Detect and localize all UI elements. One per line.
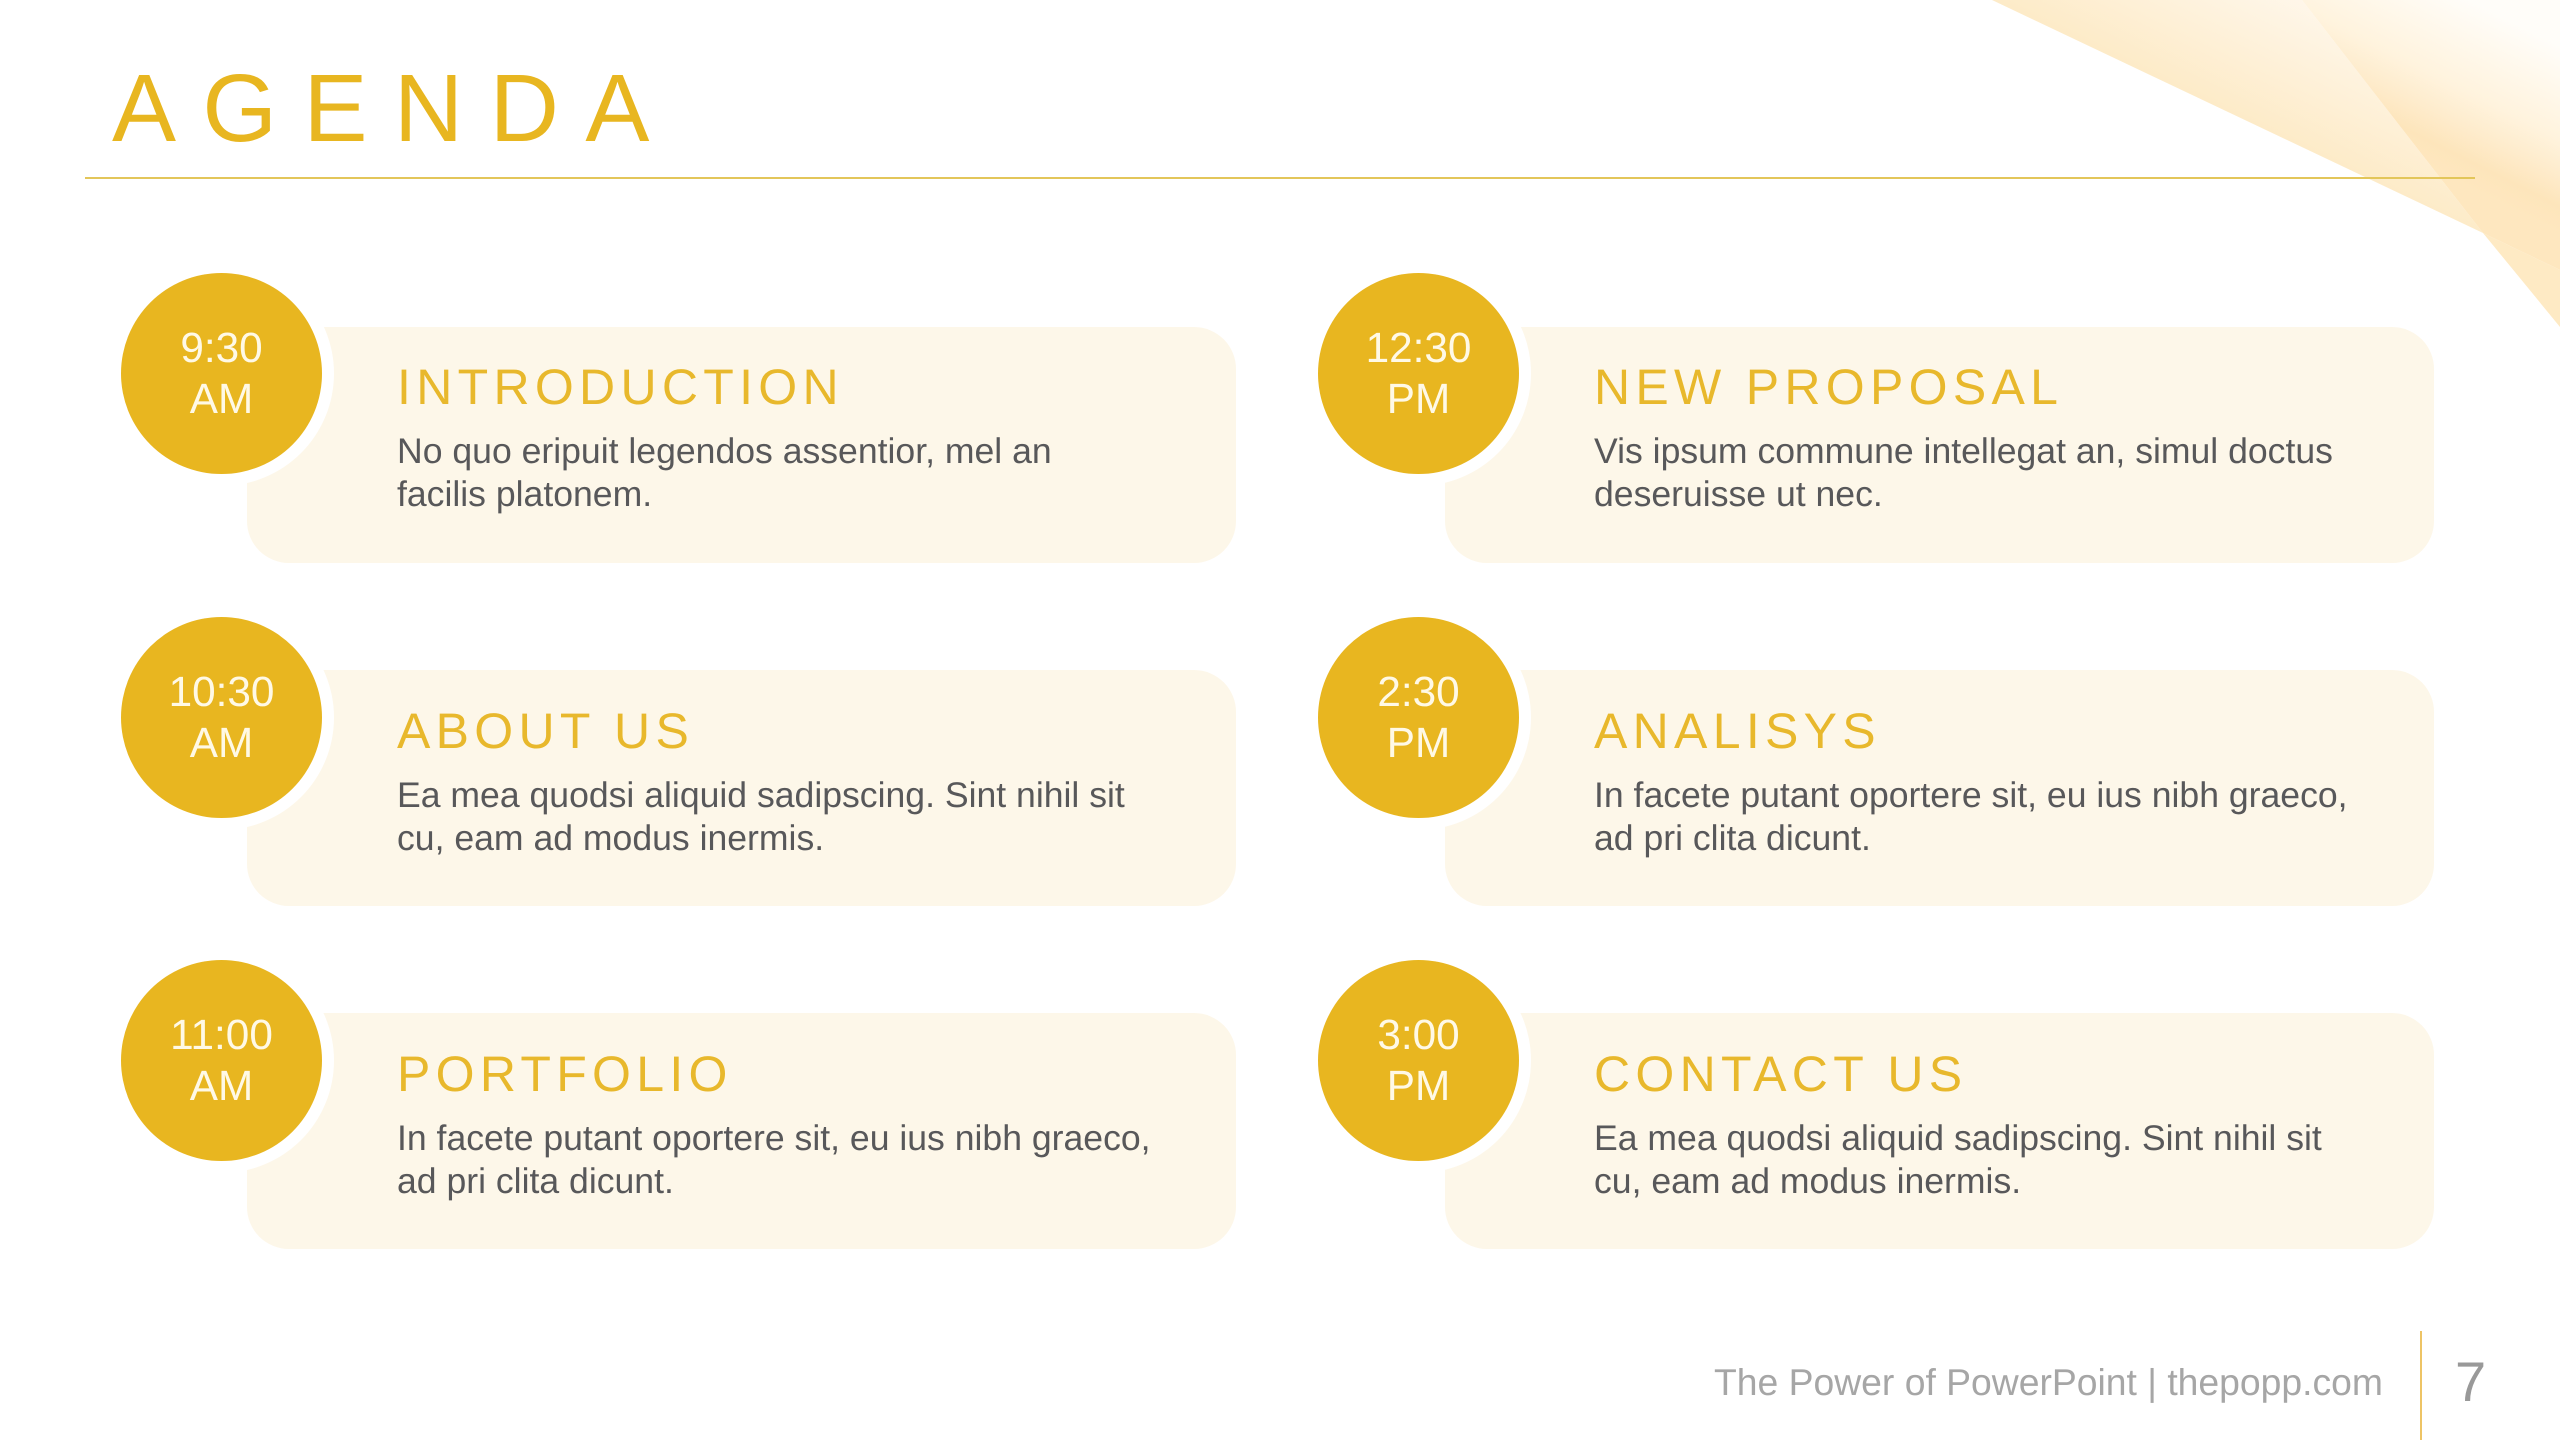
white ring xyxy=(109,605,334,830)
time circle xyxy=(121,273,322,474)
title: AGENDA xyxy=(112,55,676,162)
time circle xyxy=(1318,273,1519,474)
time label: 11:00 xyxy=(170,1011,273,1058)
card background xyxy=(1444,670,2434,906)
time circle xyxy=(1318,617,1519,818)
description xyxy=(397,775,1125,858)
agenda item: analisys xyxy=(1318,617,2434,906)
card background xyxy=(1444,327,2434,563)
description xyxy=(397,1118,1151,1201)
card background xyxy=(1444,1012,2434,1248)
description: Vis ipsum commune intellegat an, simul doctus xyxy=(1594,431,2333,471)
time label xyxy=(1377,668,1460,766)
white ring xyxy=(109,261,334,486)
time label xyxy=(1377,1011,1460,1109)
page number: 7 xyxy=(2455,1350,2486,1413)
heading: INTRODUCTION xyxy=(397,359,844,415)
time label xyxy=(170,1011,273,1109)
time label: AM xyxy=(190,1062,253,1109)
title rule xyxy=(85,177,2475,179)
description: Ea mea quodsi aliquid sadipscing. Sint nihil sit xyxy=(1594,1118,2322,1158)
time label: 3:00 xyxy=(1377,1011,1460,1058)
white ring xyxy=(109,948,334,1173)
time circle xyxy=(121,617,322,818)
heading: NEW PROPOSAL xyxy=(1594,359,2063,415)
description: In facete putant oportere sit, eu ius nibh graeco, xyxy=(397,1118,1151,1158)
heading: ABOUT US xyxy=(397,703,694,759)
time label: 9:30 xyxy=(180,324,263,371)
time circle xyxy=(1318,960,1519,1161)
description: No quo eripuit legendos assentior, mel an xyxy=(397,431,1052,471)
time label: AM xyxy=(190,719,253,766)
agenda item: contact us xyxy=(1318,960,2434,1249)
time label: 10:30 xyxy=(169,668,274,715)
white ring xyxy=(1306,261,1531,486)
description: ad pri clita dicunt. xyxy=(1594,818,1871,858)
card background xyxy=(247,1012,1236,1248)
description: cu, eam ad modus inermis. xyxy=(1594,1161,2021,1201)
time label xyxy=(169,668,274,766)
card background xyxy=(247,327,1236,563)
time label xyxy=(1366,324,1471,422)
heading: CONTACT US xyxy=(1594,1046,1967,1102)
description: ad pri clita dicunt. xyxy=(397,1161,674,1201)
card background xyxy=(247,670,1236,906)
agenda item: introduction xyxy=(121,273,1236,563)
description: facilis platonem. xyxy=(397,474,652,514)
heading: PORTFOLIO xyxy=(397,1046,733,1102)
time label: 12:30 xyxy=(1366,324,1471,371)
description: Ea mea quodsi aliquid sadipscing. Sint nihil sit xyxy=(397,775,1125,815)
time label: 2:30 xyxy=(1377,668,1460,715)
time label: AM xyxy=(190,375,253,422)
agenda item: new proposal xyxy=(1318,273,2434,563)
heading: ANALISYS xyxy=(1594,703,1881,759)
description: cu, eam ad modus inermis. xyxy=(397,818,824,858)
agenda item: about us xyxy=(121,617,1236,906)
time label: PM xyxy=(1387,719,1450,766)
description xyxy=(1594,1118,2322,1201)
white ring xyxy=(1306,605,1531,830)
white ring xyxy=(1306,948,1531,1173)
time label: PM xyxy=(1387,1062,1450,1109)
description xyxy=(1594,775,2348,858)
time circle xyxy=(121,960,322,1161)
time label: PM xyxy=(1387,375,1450,422)
description: In facete putant oportere sit, eu ius nibh graeco, xyxy=(1594,775,2348,815)
time label xyxy=(180,324,263,422)
description xyxy=(1594,431,2333,514)
footer text: The Power of PowerPoint | thepopp.com xyxy=(1714,1361,2383,1403)
description xyxy=(397,431,1052,514)
footer divider xyxy=(2420,1331,2422,1440)
description: deseruisse ut nec. xyxy=(1594,474,1883,514)
agenda item: portfolio xyxy=(121,960,1236,1249)
